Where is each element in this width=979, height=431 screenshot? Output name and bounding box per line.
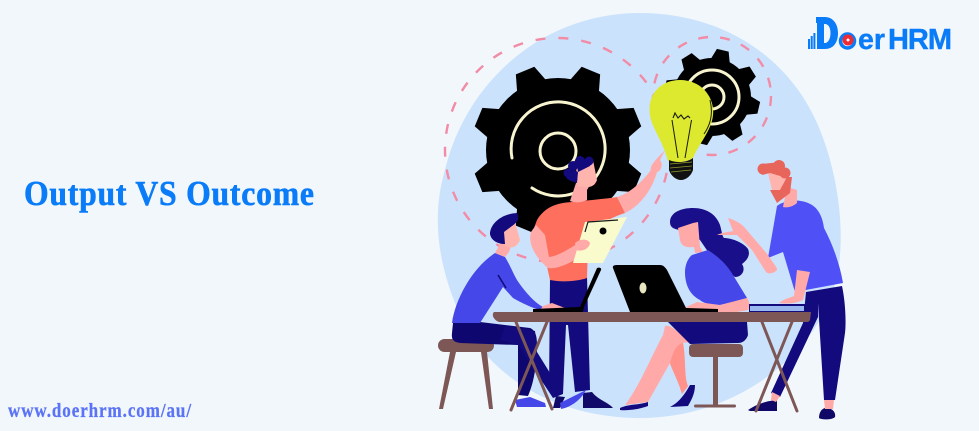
stool: left: [438, 339, 494, 409]
book on table: [749, 304, 807, 313]
tablet held by standing man: [573, 217, 627, 263]
logo letter D: [816, 17, 838, 49]
laptop: woman: [613, 265, 718, 312]
laptop: seated man: [533, 268, 601, 312]
stool: right: [689, 344, 743, 408]
person: seated woman: [620, 208, 749, 410]
title: Output VS Outcome: [24, 175, 315, 213]
logo target o: [840, 34, 854, 48]
person: standing man pointing at bulb: [530, 150, 665, 408]
person: seated man with sweater: [452, 213, 586, 409]
table: [493, 312, 811, 411]
dashed orbit around small gear: [653, 37, 771, 155]
person: standing man with beard: [717, 160, 846, 419]
logo wordmark: HRM: HRM: [888, 24, 952, 56]
icon: light bulb: [650, 80, 713, 180]
dashed orbit around large gear: [445, 38, 669, 262]
website url: www.doerhrm.com/au/: [8, 400, 192, 422]
logo bars: [808, 33, 815, 49]
icon: small gear: [663, 48, 761, 146]
background blob: [438, 13, 841, 418]
logo wordmark: er: er: [858, 24, 885, 56]
icon: large gear: [472, 64, 644, 236]
